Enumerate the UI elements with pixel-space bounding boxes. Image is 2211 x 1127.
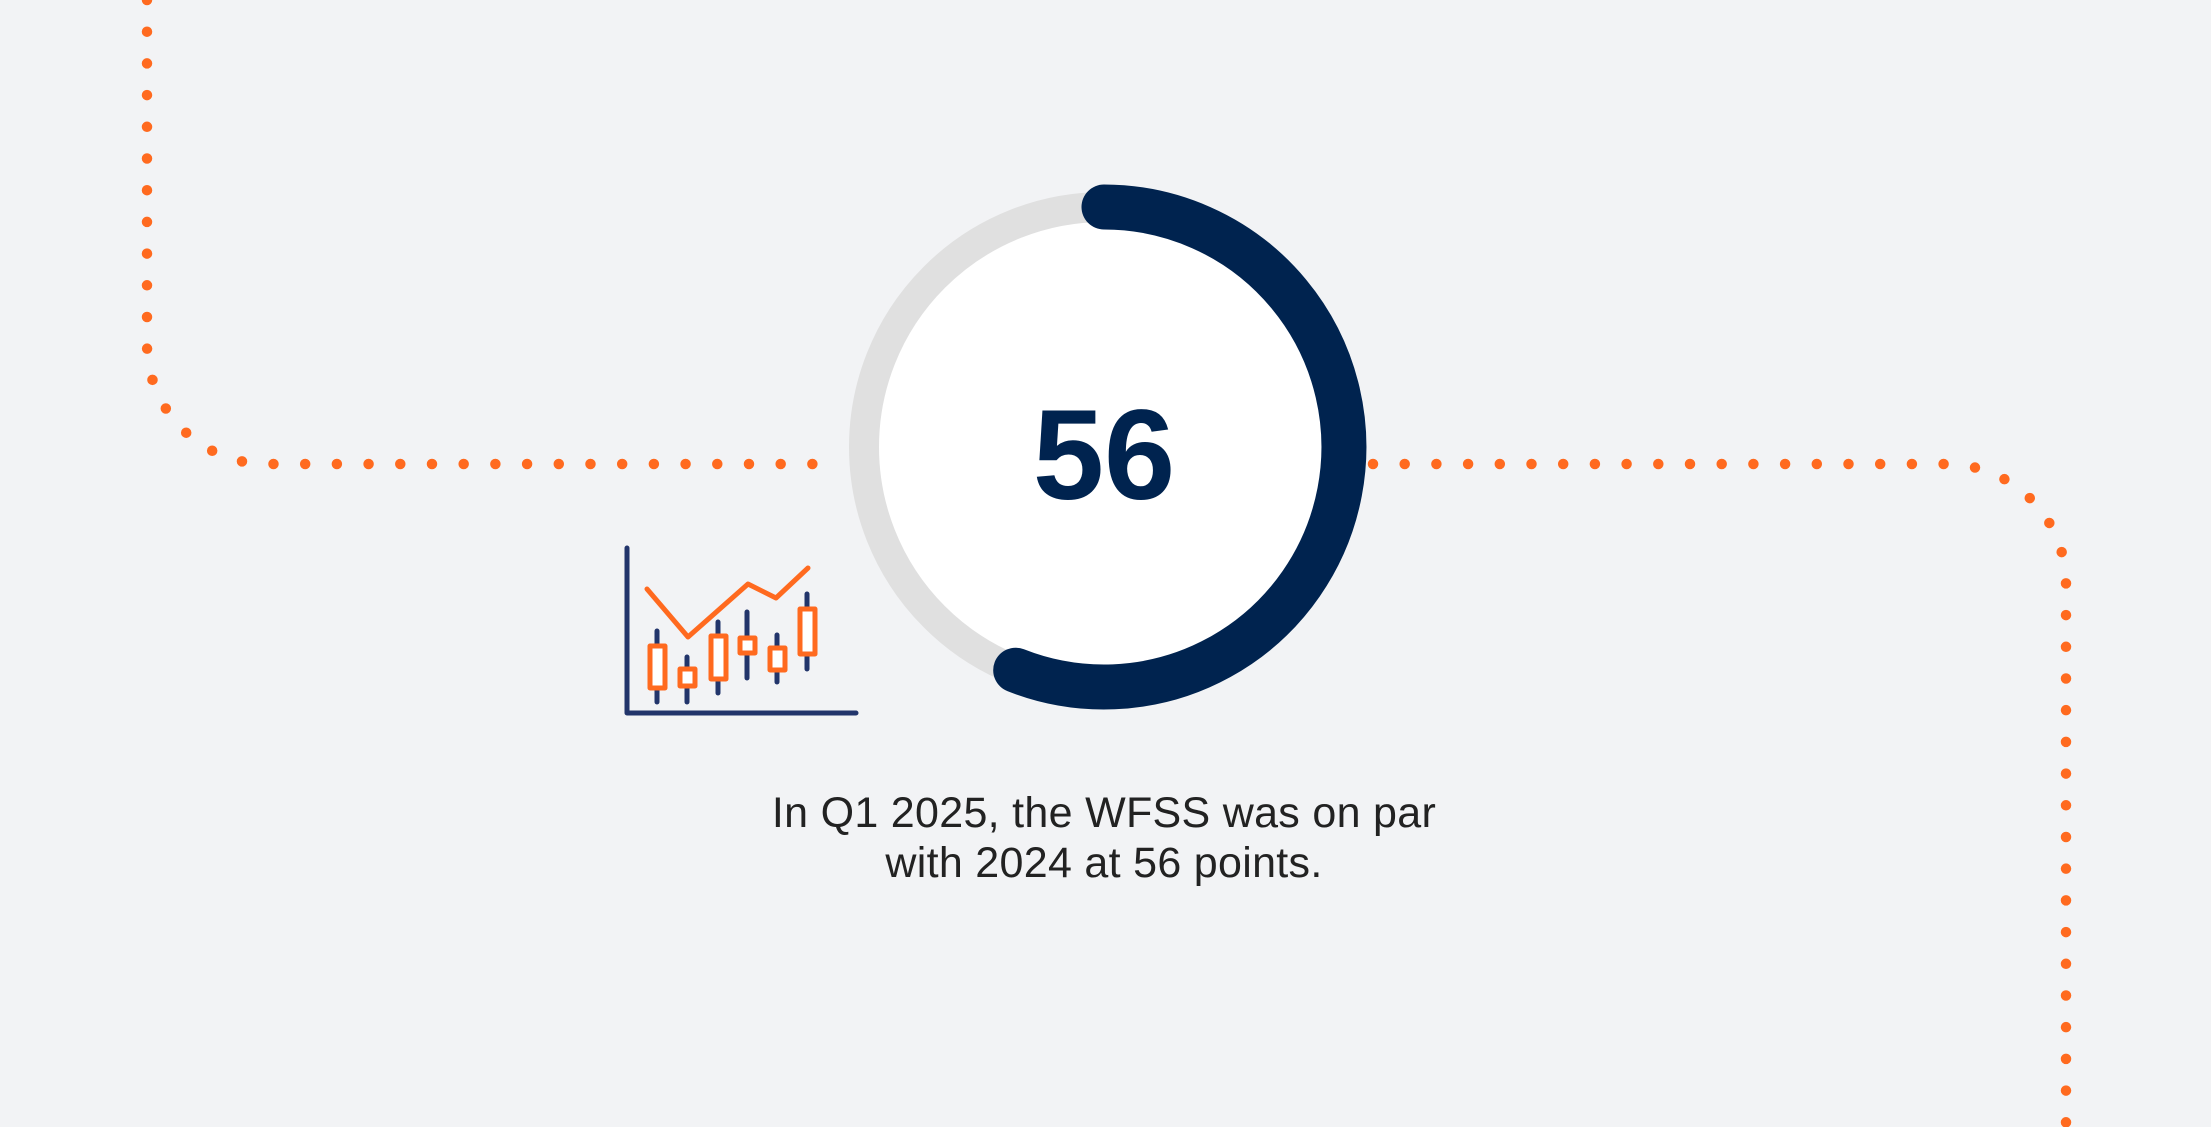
dotted path right (1373, 464, 2066, 1127)
icon: candlestick chart (627, 548, 856, 713)
dotted path left (147, 0, 842, 464)
value 56: 56 (1033, 384, 1175, 527)
caption text: with 2024 at 56 points. (885, 839, 1323, 887)
gauge: 56 points (864, 207, 1344, 687)
caption text (772, 789, 1436, 887)
caption text: In Q1 2025, the WFSS was on par (772, 789, 1436, 837)
